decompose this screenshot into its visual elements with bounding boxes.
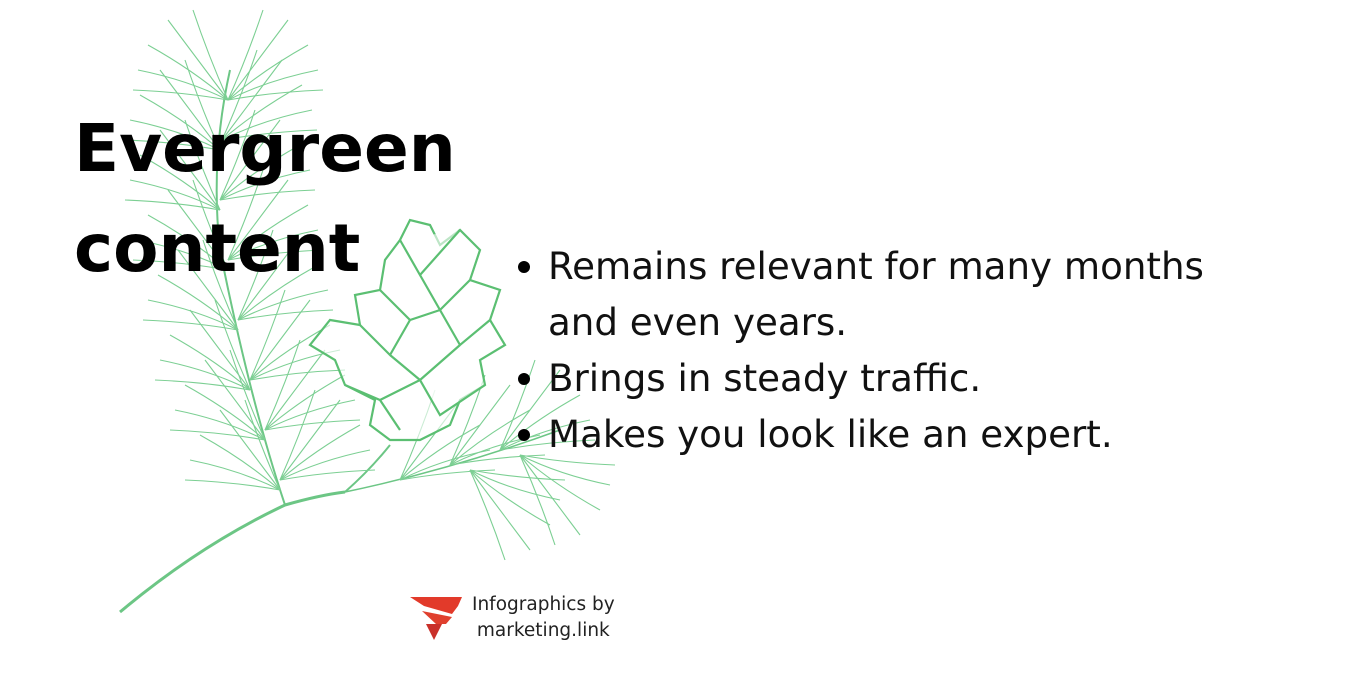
bullet list: Brings in steady traffic. xyxy=(548,356,981,400)
bullet list xyxy=(518,244,1204,456)
credit text: marketing.link xyxy=(477,620,610,641)
credit text xyxy=(472,594,615,641)
credit text: Infographics by xyxy=(472,594,615,615)
main stem xyxy=(120,492,345,612)
pine cone xyxy=(310,220,505,440)
bullet list: Remains relevant for many months xyxy=(548,244,1204,288)
bullet list: and even years. xyxy=(548,300,847,344)
bullet list: Makes you look like an expert. xyxy=(548,412,1113,456)
icon: marketing.link logo xyxy=(410,597,462,640)
title: Evergreen xyxy=(74,110,456,187)
title: content xyxy=(74,210,360,287)
credit: logo and text xyxy=(410,594,615,641)
title xyxy=(74,110,456,287)
